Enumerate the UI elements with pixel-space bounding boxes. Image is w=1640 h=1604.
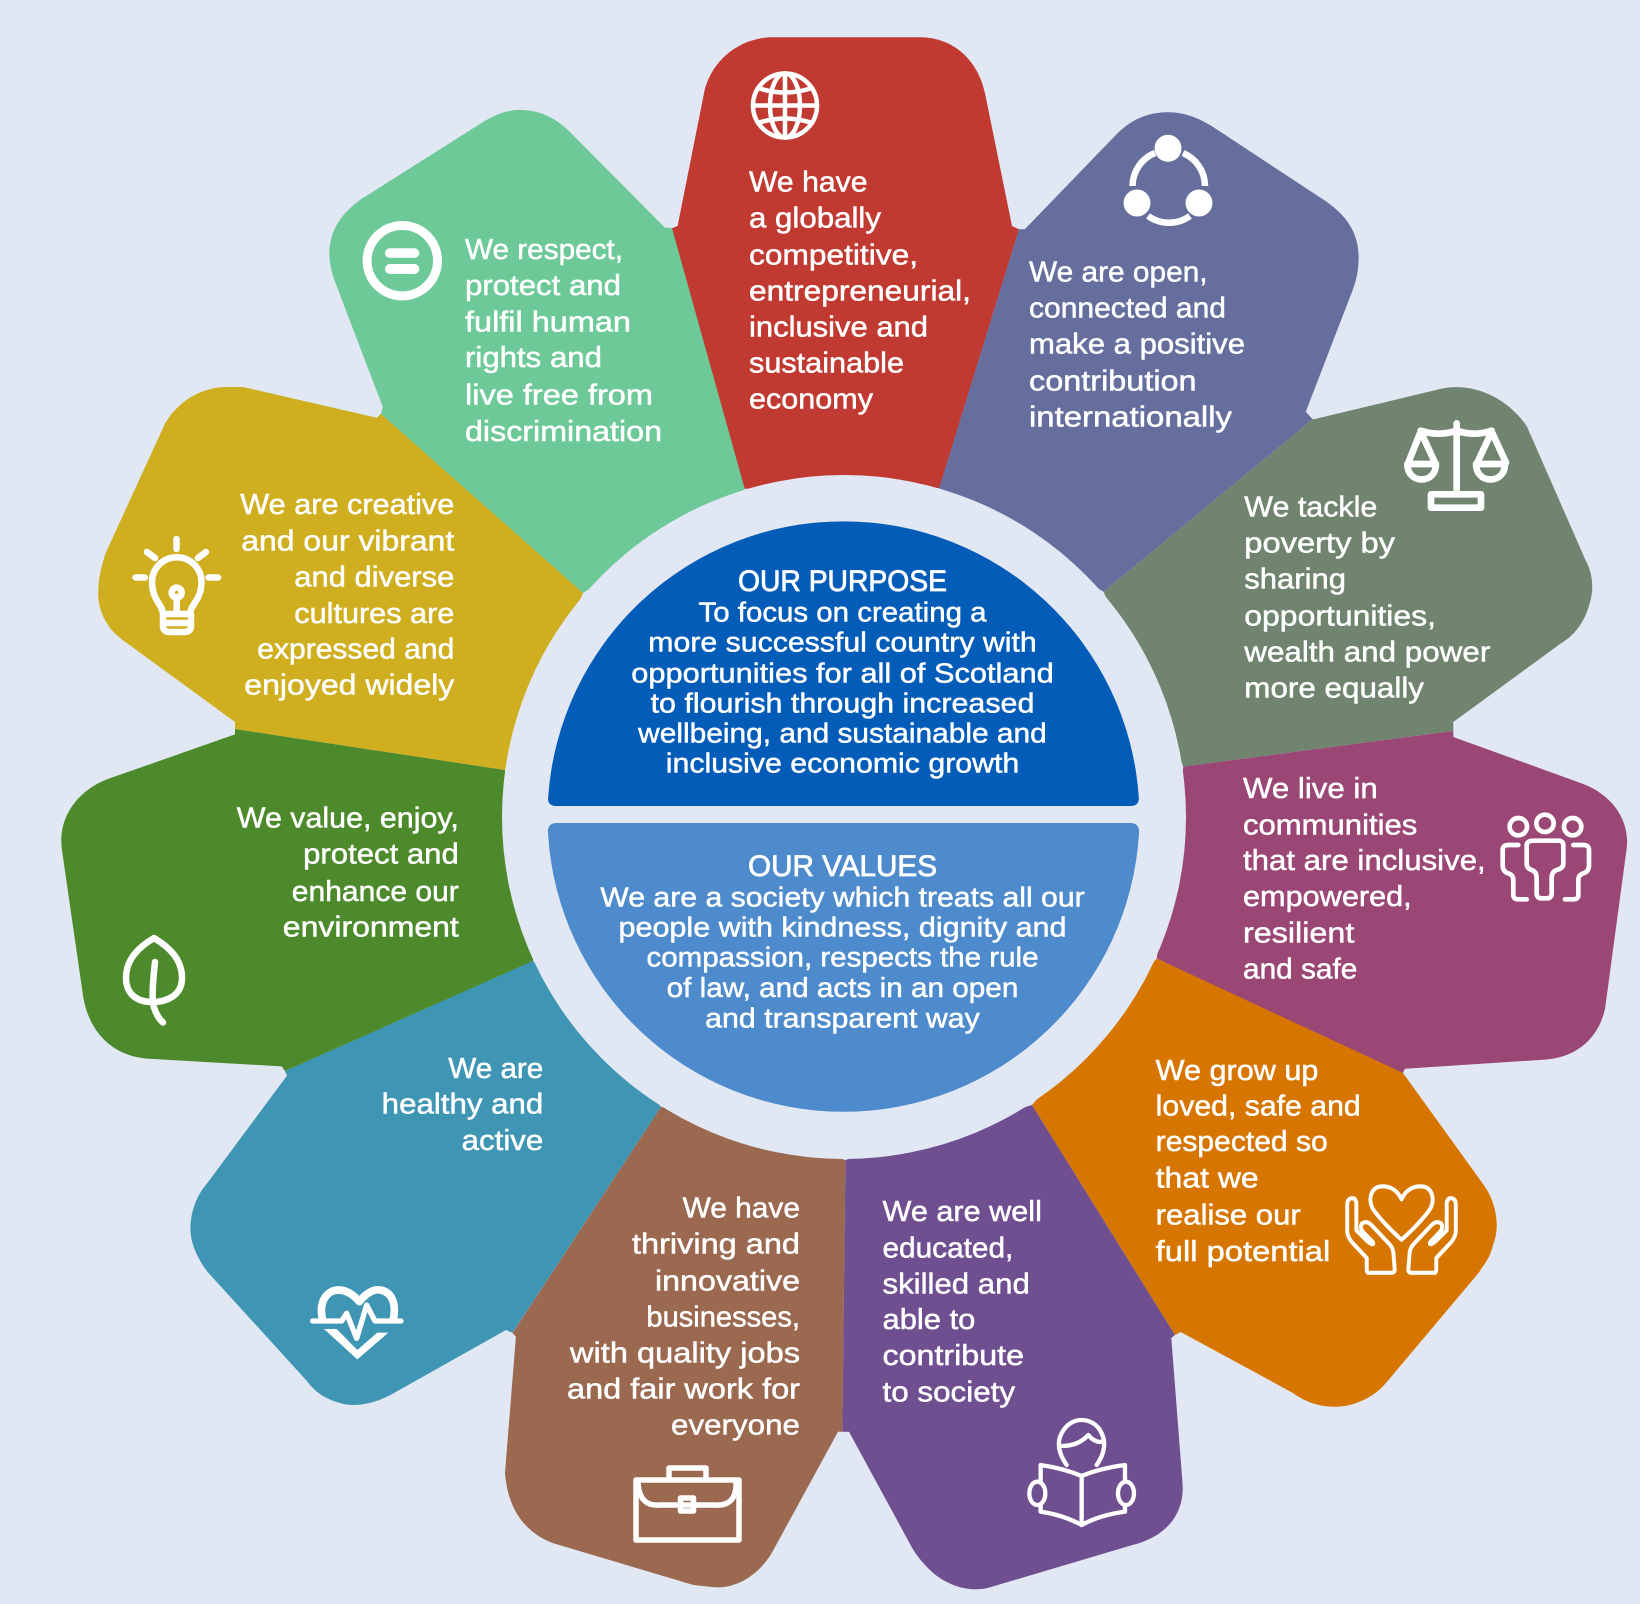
icon: network circles xyxy=(1124,135,1212,223)
petal shape: mint xyxy=(329,110,745,593)
text: children: that we xyxy=(1156,1162,1259,1194)
text: purpose: OUR PURPOSE xyxy=(738,565,947,598)
text: values: people with kindness, dignity and xyxy=(618,912,1066,943)
panel: international petal xyxy=(939,112,1359,592)
text: economy: We have xyxy=(749,167,868,199)
icon: scales xyxy=(1407,423,1506,508)
panel: environment petal xyxy=(61,729,533,1071)
text: purpose: inclusive economic growth xyxy=(666,748,1019,779)
panel: culture petal xyxy=(98,387,583,770)
text: education: educated, xyxy=(882,1233,1013,1265)
icon: briefcase xyxy=(636,1468,739,1540)
petal shape: purple xyxy=(842,1105,1183,1589)
text: communities: empowered, xyxy=(1243,881,1412,913)
text: communities: and safe xyxy=(1243,953,1357,985)
text: communities xyxy=(1243,773,1486,985)
text: values: We are a society which treats all our xyxy=(600,881,1085,912)
panel: education petal xyxy=(842,1105,1183,1589)
text: economy: economy xyxy=(749,383,874,415)
text: culture: and diverse xyxy=(294,562,454,594)
text: human rights xyxy=(465,234,662,448)
icon: heartbeat xyxy=(313,1290,401,1359)
text: children: realise our xyxy=(1156,1200,1301,1232)
icon: person reading xyxy=(1029,1420,1134,1525)
panel: human rights petal xyxy=(329,110,745,593)
text: values xyxy=(600,850,1085,1034)
text: business: thriving and xyxy=(632,1229,800,1261)
text: purpose: more successful country with xyxy=(648,626,1037,658)
text: poverty: more equally xyxy=(1244,673,1425,705)
text: purpose: To focus on creating a xyxy=(698,597,987,628)
text: children: respected so xyxy=(1156,1126,1328,1158)
text: children xyxy=(1156,1055,1361,1268)
icon: globe xyxy=(753,74,817,138)
text: human rights: fulfil human xyxy=(465,306,631,338)
panel: children petal xyxy=(1032,958,1497,1407)
text: values: compassion, respects the rule xyxy=(646,941,1038,972)
text: children: We grow up xyxy=(1156,1055,1318,1087)
text: human rights: discrimination xyxy=(465,416,662,448)
petal shape: brown xyxy=(505,1107,845,1587)
text: business: with quality jobs xyxy=(569,1338,800,1370)
text: culture: We are creative xyxy=(240,489,454,521)
text: culture: enjoyed widely xyxy=(244,670,455,702)
text: communities: communities xyxy=(1243,810,1417,842)
text: poverty: wealth and power xyxy=(1243,636,1491,668)
petal shape: olive xyxy=(1104,387,1592,767)
icon: leaf xyxy=(126,938,182,1022)
text: international: connected and xyxy=(1029,293,1226,325)
text: education: able to xyxy=(882,1304,975,1336)
text: poverty: We tackle xyxy=(1244,491,1377,523)
text: education: to society xyxy=(882,1377,1016,1409)
text: economy: inclusive and xyxy=(749,312,928,344)
semicircle: purpose xyxy=(548,521,1139,806)
text: communities: We live in xyxy=(1243,773,1378,805)
panel: health petal xyxy=(190,961,661,1405)
text: international: make a positive xyxy=(1029,328,1245,360)
text: environment xyxy=(237,803,459,944)
text: business: We have xyxy=(683,1193,800,1225)
text: purpose: wellbeing, and sustainable and xyxy=(637,717,1047,748)
text: communities: resilient xyxy=(1243,917,1354,949)
text: purpose: opportunities for all of Scotland xyxy=(631,658,1054,689)
text: values: and transparent way xyxy=(705,1002,980,1034)
icon: hands and heart xyxy=(1347,1186,1456,1273)
icon: lightbulb xyxy=(136,539,218,632)
text: environment: enhance our xyxy=(292,876,459,908)
text: values: OUR VALUES xyxy=(748,850,937,883)
text: business: innovative xyxy=(655,1265,800,1297)
text: poverty xyxy=(1243,491,1491,705)
petal shape: teal xyxy=(190,961,661,1405)
text: health: healthy and xyxy=(382,1088,543,1120)
text: environment: protect and xyxy=(303,838,459,870)
text: human rights: protect and xyxy=(465,270,621,302)
text: education: skilled and xyxy=(882,1268,1030,1300)
text: purpose xyxy=(631,565,1054,779)
text: culture: expressed and xyxy=(257,634,454,666)
text: economy: sustainable xyxy=(749,347,904,379)
text: children: loved, safe and xyxy=(1156,1091,1361,1123)
text: education xyxy=(882,1196,1042,1409)
semicircle: values xyxy=(548,823,1139,1112)
text: values: of law, and acts in an open xyxy=(667,972,1018,1003)
panel: our purpose xyxy=(548,521,1139,806)
text: international: contribution xyxy=(1029,366,1197,398)
text: international: internationally xyxy=(1029,402,1233,434)
petal shape: orange xyxy=(1032,958,1497,1407)
text: health: active xyxy=(462,1125,543,1157)
panel: communities petal xyxy=(1157,731,1627,1075)
petal shape: periwinkle xyxy=(939,112,1359,592)
text: health: We are xyxy=(448,1053,543,1085)
text: human rights: We respect, xyxy=(465,234,623,266)
text: economy xyxy=(749,167,971,415)
panel: business petal xyxy=(505,1107,845,1587)
icon: people group xyxy=(1503,815,1589,899)
text: poverty: sharing xyxy=(1244,563,1346,595)
text: international: We are open, xyxy=(1029,257,1208,289)
text: environment: We value, enjoy, xyxy=(237,803,459,835)
text: business: businesses, xyxy=(646,1302,800,1334)
text: international xyxy=(1029,257,1245,434)
text: environment: environment xyxy=(283,912,459,944)
text: economy: a globally xyxy=(749,203,882,235)
text: culture xyxy=(240,489,455,702)
text: business: everyone xyxy=(671,1409,800,1441)
icon: equals in circle xyxy=(367,226,437,296)
text: education: contribute xyxy=(882,1340,1024,1372)
panel: our values xyxy=(548,823,1139,1112)
panel: poverty petal xyxy=(1104,387,1592,767)
petal shape: yellow xyxy=(98,387,583,770)
text: purpose: to flourish through increased xyxy=(651,688,1034,718)
text: culture: and our vibrant xyxy=(241,525,454,557)
centre circle xyxy=(502,475,1186,1159)
petal shape: red xyxy=(672,37,1019,489)
text: business: and fair work for xyxy=(567,1373,800,1405)
text: culture: cultures are xyxy=(294,598,454,630)
text: poverty: opportunities, xyxy=(1244,601,1436,633)
text: business xyxy=(567,1193,800,1441)
text: health xyxy=(382,1053,543,1157)
text: education: We are well xyxy=(882,1196,1042,1228)
panel: economy petal xyxy=(672,37,1019,489)
text: poverty: poverty by xyxy=(1244,528,1396,560)
text: economy: competitive, xyxy=(749,239,918,271)
text: children: full potential xyxy=(1156,1236,1330,1268)
text: human rights: live free from xyxy=(465,380,653,412)
text: human rights: rights and xyxy=(465,342,602,374)
petal shape: plum xyxy=(1157,731,1627,1075)
text: communities: that are inclusive, xyxy=(1243,845,1486,877)
text: economy: entrepreneurial, xyxy=(749,276,971,308)
petal shape: green xyxy=(61,729,533,1071)
